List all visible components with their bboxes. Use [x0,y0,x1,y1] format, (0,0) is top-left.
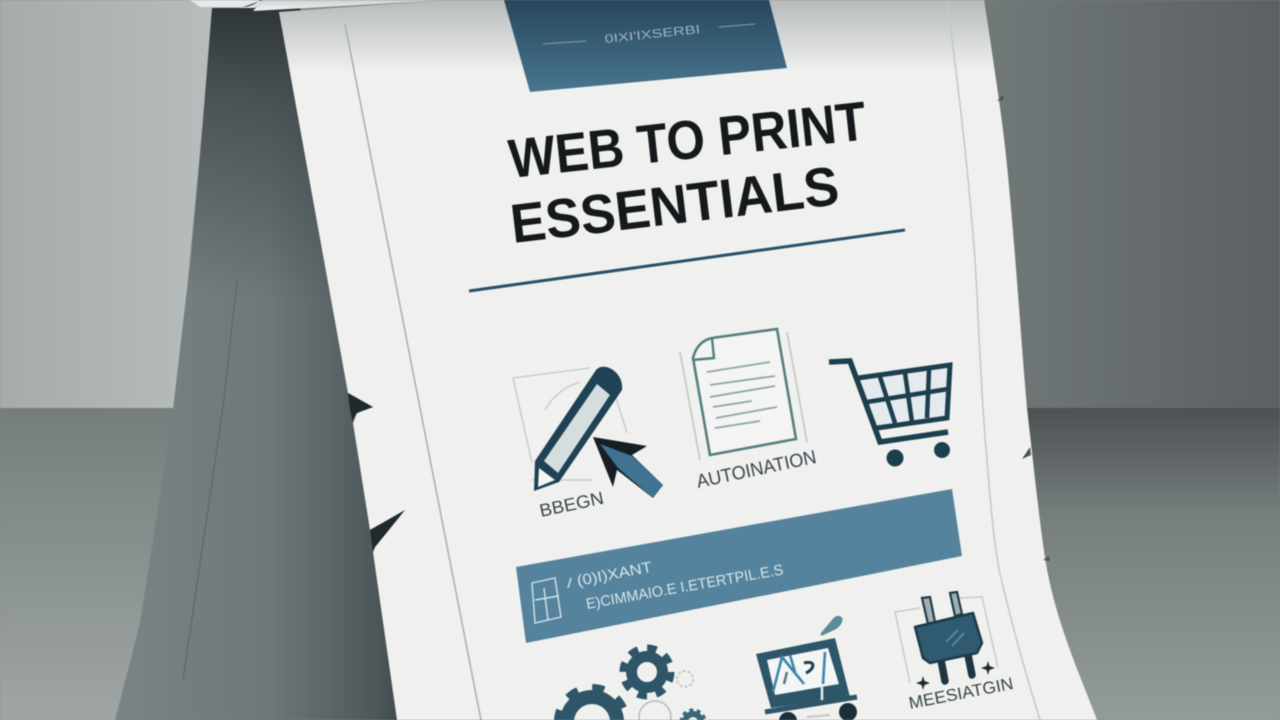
title [506,90,869,255]
title: WEB TO PRINT [506,90,869,190]
icon: gears [558,648,705,720]
band icon [532,578,571,623]
header box label: 0IXI'IXSERBI [604,22,701,46]
label: integration: MEESIATGIN [907,674,1015,713]
content band [516,489,962,643]
label: automation: AUTOINATION [695,447,818,493]
roller at top [190,0,447,11]
label: design: BBEGN [538,488,605,521]
band text: (0)I)XANT [576,559,653,590]
icon: API laptop [756,617,857,720]
icon: shopping cart [829,361,950,466]
icon: plug [895,592,998,690]
icon: document [680,329,807,460]
paper shadow [115,8,420,720]
title: ESSENTIALS [507,154,842,255]
icon: design pen and cursor [513,367,663,498]
header box [504,0,787,92]
paper sheet [279,0,1097,720]
band text: E)CIMMAIO.E I.ETERTPIL.E.S [585,561,785,613]
title underline [469,230,905,291]
